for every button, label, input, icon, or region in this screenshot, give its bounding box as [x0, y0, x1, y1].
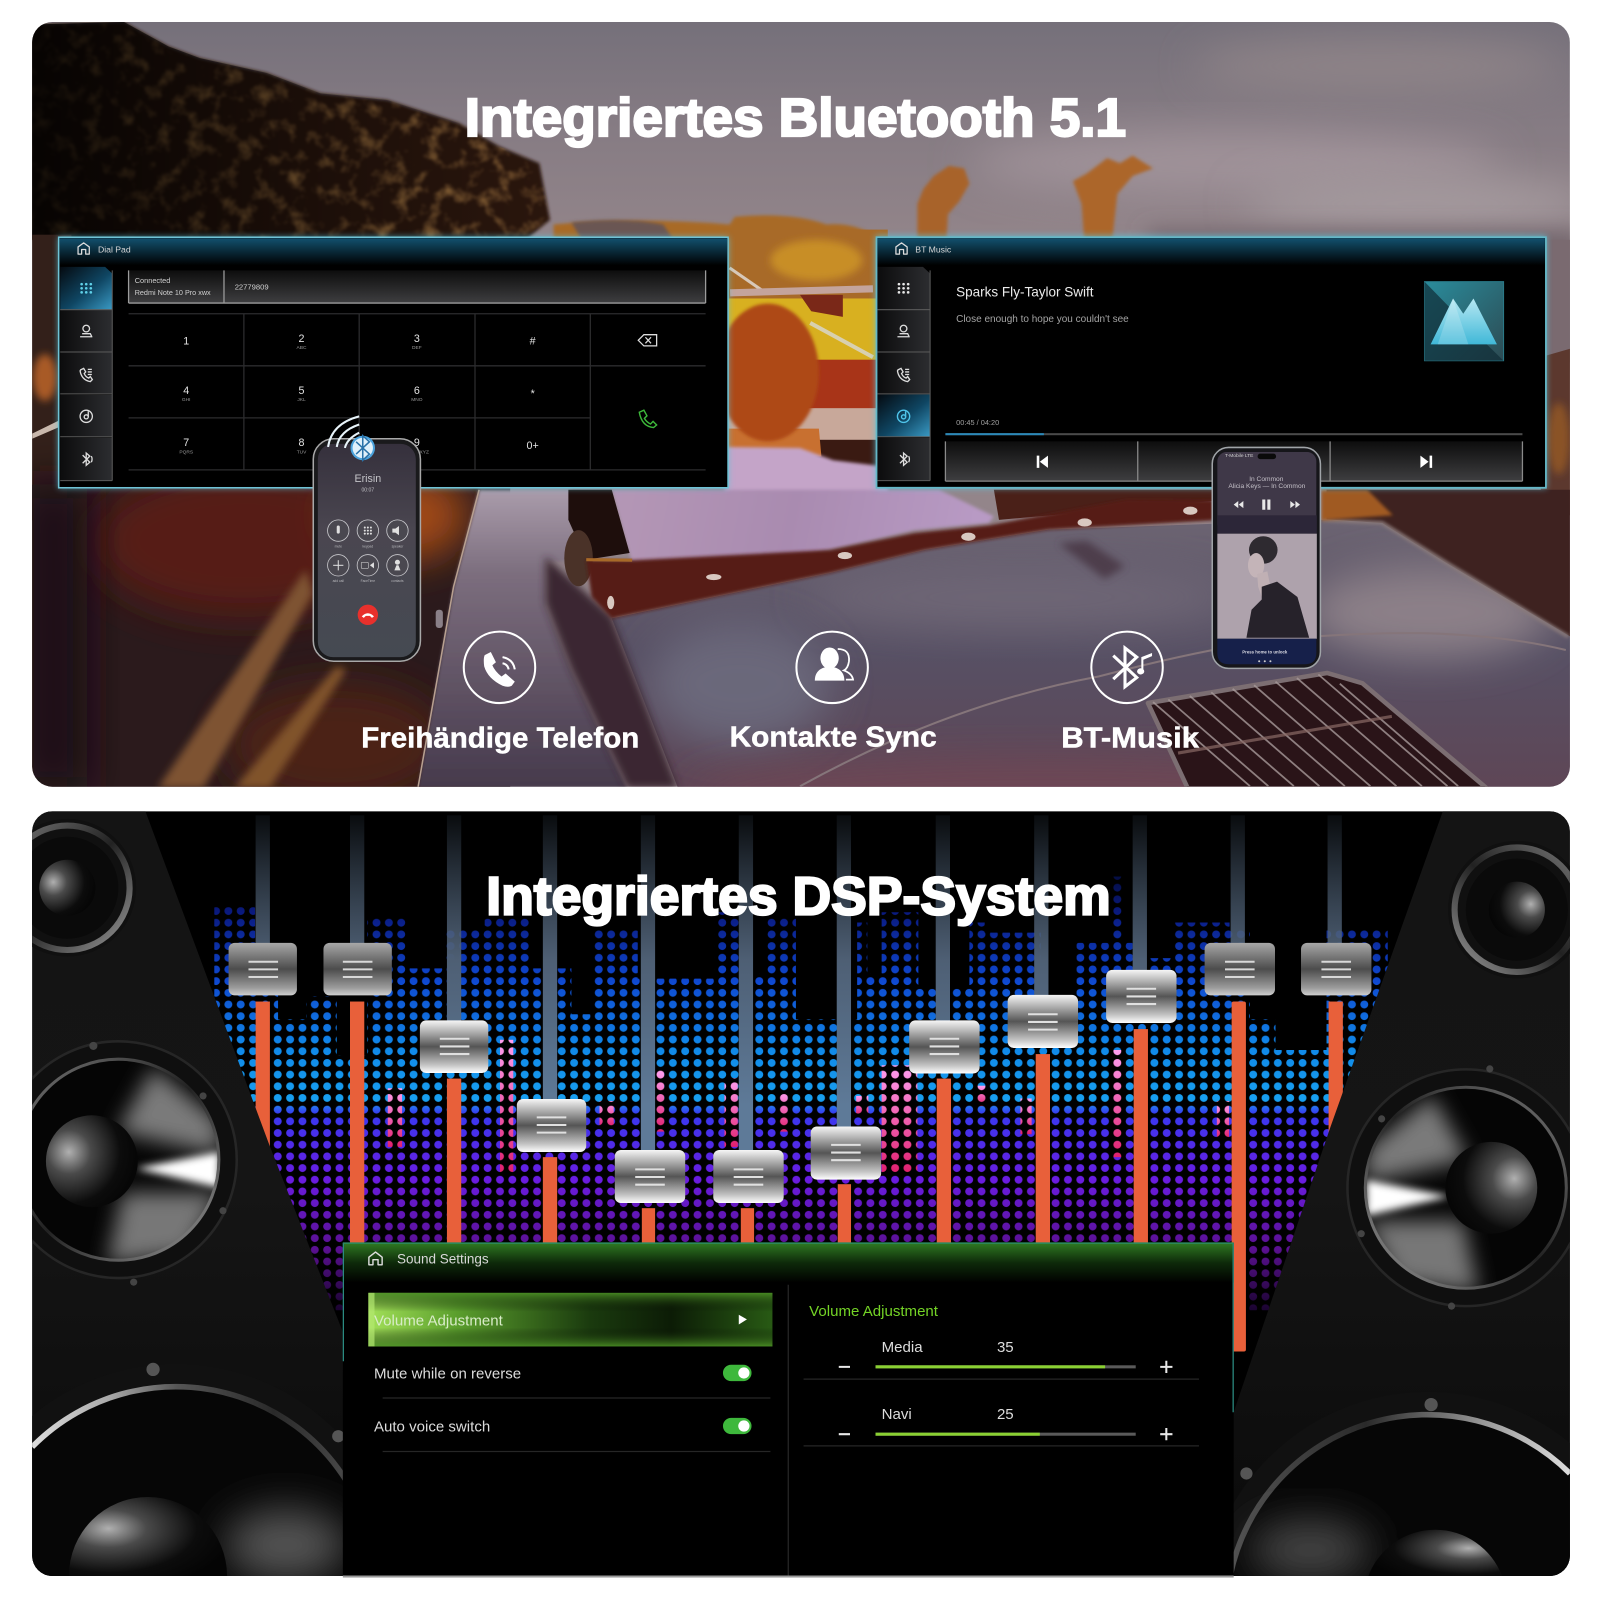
screen title: BT Music: BT Music — [915, 245, 952, 255]
title: Integriertes Bluetooth 5.1: Integriertes Bluetooth 5.1 — [465, 88, 1126, 148]
playback controls — [945, 441, 1522, 481]
keypad: 1 — [183, 335, 189, 347]
icon: home — [78, 243, 89, 254]
icon: green call button — [639, 410, 657, 428]
fader 11 — [1205, 815, 1275, 1352]
keypad: 3 — [414, 333, 420, 345]
icon: backspace — [638, 335, 657, 346]
call action buttons: keypad — [363, 544, 373, 548]
progress bar — [945, 433, 1522, 435]
input bar: connected device and number: Redmi Note 10 Pro xwx — [135, 288, 211, 297]
keypad: 8 — [299, 437, 305, 449]
fader 3 — [420, 815, 488, 1247]
icon: home — [369, 1252, 382, 1265]
input bar: connected device and number — [129, 270, 706, 303]
now playing text: In Common — [1249, 476, 1284, 483]
label: Freihändige Telefon: Freihändige Telefon — [361, 722, 639, 754]
icon: bluetooth badge — [351, 436, 375, 460]
label: Kontakte Sync: Kontakte Sync — [730, 721, 937, 753]
tweeter — [1448, 841, 1586, 979]
keypad: 9 — [414, 437, 420, 449]
call duration: 00:07 — [361, 487, 374, 493]
album art — [1424, 282, 1504, 361]
keypad: 7 — [183, 437, 189, 449]
keypad: JKL — [297, 397, 306, 403]
keypad: * — [531, 388, 535, 400]
input bar: connected device and number: 22779809 — [235, 282, 269, 291]
fader 1 — [229, 815, 297, 1155]
equalizer dot field — [204, 851, 1398, 1320]
sidebar menu — [878, 267, 930, 481]
keypad: # — [530, 335, 536, 347]
feature: hands-free calling — [361, 632, 639, 754]
mid-range driver — [0, 1041, 237, 1286]
fader 12 — [1301, 815, 1371, 1155]
menu row: Mute while on reverse: Mute while on reverse — [374, 1366, 521, 1383]
status bar: T-Mobile LTE — [1225, 453, 1254, 459]
caller name: Erisin — [354, 473, 381, 485]
now playing text — [1228, 476, 1306, 490]
keypad: 6 — [414, 385, 420, 397]
section heading: Volume Adjustment: Volume Adjustment — [809, 1303, 939, 1320]
now playing text: Alicia Keys — In Common — [1228, 483, 1306, 490]
call action buttons: add call — [333, 579, 344, 583]
feature: contacts sync — [730, 632, 937, 753]
input bar: connected device and number: Connected — [135, 276, 170, 285]
keypad: DEF — [412, 345, 422, 351]
call action buttons — [328, 520, 408, 583]
phone: music player — [1212, 447, 1320, 668]
fader 4 — [517, 815, 586, 1246]
slider: Navi: 25 — [997, 1406, 1014, 1423]
fader 10 — [1106, 815, 1177, 1247]
tweeter — [0, 819, 136, 957]
keypad: 2 — [299, 333, 305, 345]
sidebar menu — [60, 267, 112, 481]
menu row: Mute while on reverse — [374, 1365, 752, 1383]
right speaker cabinet — [1167, 811, 1586, 1581]
slider: Navi: Navi — [882, 1406, 912, 1423]
lock screen footer — [1217, 639, 1316, 664]
icon: home — [896, 243, 907, 254]
keypad: 0+ — [527, 440, 539, 452]
phone: call screen — [313, 416, 420, 661]
icon: phone — [464, 632, 535, 703]
keypad: 5 — [299, 385, 305, 397]
lyric line: Close enough to hope you couldn't see — [956, 314, 1129, 325]
slider: Media: 35 — [997, 1339, 1014, 1356]
call action buttons: speaker — [392, 544, 404, 548]
keypad — [129, 314, 706, 470]
icon: next — [1420, 456, 1432, 468]
background photo: road trip at sunset — [20, 22, 1592, 832]
label: BT-Musik: BT-Musik — [1061, 722, 1200, 754]
player controls — [1234, 499, 1300, 510]
fader 9 — [1008, 815, 1078, 1247]
keypad: TUV — [297, 450, 307, 456]
call action buttons: mute — [335, 544, 342, 548]
keypad: MNO — [411, 397, 423, 403]
keypad: ABC — [297, 345, 307, 351]
icon: Bluetooth music — [1091, 632, 1163, 703]
selected menu row: Volume Adjustment: Volume Adjustment — [374, 1313, 504, 1330]
icon: signal waves — [328, 416, 359, 448]
mid-range driver — [1347, 1065, 1584, 1310]
selected menu row: Volume Adjustment — [368, 1293, 772, 1346]
slider: Navi — [839, 1406, 1172, 1440]
icon: previous — [1037, 456, 1048, 468]
faders — [229, 815, 1371, 1352]
slider: Media — [839, 1339, 1172, 1373]
feature: Bluetooth music — [1061, 632, 1200, 754]
screen: Sound Settings — [343, 1242, 1234, 1576]
call action buttons: contacts — [391, 579, 404, 583]
fader 6 — [713, 815, 784, 1246]
fader 2 — [323, 815, 392, 1246]
fader 5 — [615, 815, 685, 1246]
screen: BT Music — [876, 236, 1546, 488]
screen: Dial Pad — [58, 237, 729, 488]
icon: end call — [358, 605, 378, 625]
panel: DSP section — [0, 811, 1586, 1581]
time label: 00:45 / 04:20 — [956, 418, 999, 427]
icon: contacts — [796, 632, 868, 703]
keypad: GHI — [182, 397, 191, 403]
menu row: Auto voice switch — [374, 1418, 752, 1436]
fader 8 — [909, 815, 980, 1247]
keypad: 4 — [183, 385, 189, 397]
screen title: Sound Settings: Sound Settings — [397, 1251, 489, 1266]
menu row: Auto voice switch: Auto voice switch — [374, 1419, 490, 1436]
bass driver — [32, 1363, 400, 1581]
lock screen footer: Press home to unlock — [1242, 650, 1288, 655]
keypad: WXYZ — [415, 450, 429, 456]
song title: Sparks Fly-Taylor Swift — [956, 284, 1094, 299]
slider: Media: Media — [882, 1339, 923, 1356]
keypad: PQRS — [179, 450, 193, 456]
panel: Bluetooth section — [20, 22, 1592, 832]
bass driver — [1207, 1392, 1570, 1581]
left speaker cabinet — [0, 811, 439, 1581]
album photo — [1217, 534, 1317, 639]
call action buttons: FaceTime — [361, 579, 375, 583]
fader 7 — [811, 815, 881, 1246]
screen title: Dial Pad: Dial Pad — [98, 245, 131, 255]
title: Integriertes DSP-System: Integriertes DSP-System — [486, 866, 1111, 926]
